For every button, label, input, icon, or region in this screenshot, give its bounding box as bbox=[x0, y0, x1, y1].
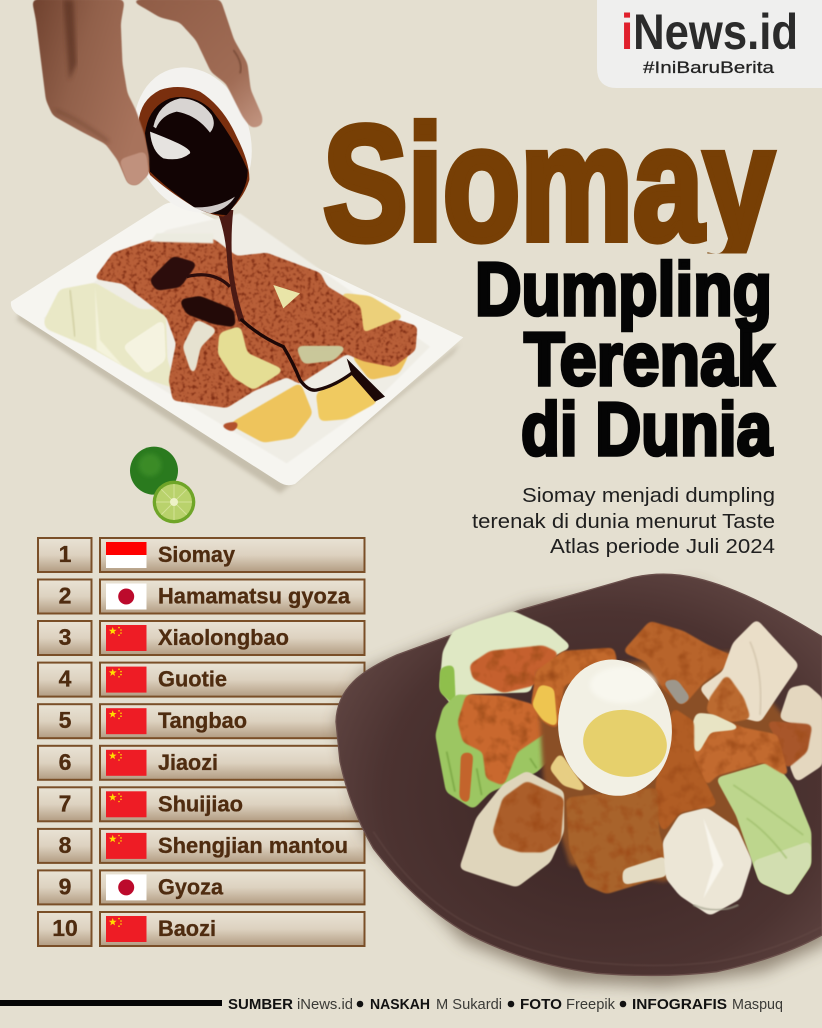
row 1: Siomay bbox=[38, 538, 364, 572]
dark plate bbox=[336, 574, 822, 975]
pale dumplings bbox=[218, 327, 283, 389]
footer credits: INFOGRAFIS bbox=[632, 996, 727, 1013]
small potato under egg bbox=[550, 753, 587, 792]
subtitle text block: Atlas periode Juli 2024 bbox=[550, 535, 775, 558]
cabbage bbox=[44, 283, 177, 388]
far right dumpling bbox=[780, 685, 822, 782]
row 5: Tangbao: Tangbao bbox=[158, 708, 247, 733]
row 6: Jiaozi bbox=[38, 746, 364, 780]
row 4: Guotie bbox=[38, 663, 364, 697]
title: Dumpling Terenak di Dunia: Terenak bbox=[524, 317, 774, 401]
logo wordmark: iNews.id bbox=[621, 4, 798, 60]
hand with bowl bbox=[33, 0, 270, 228]
left dumpling bbox=[460, 772, 563, 887]
row 2: Hamamatsu gyoza: 2 bbox=[59, 582, 71, 608]
sauce on roll bbox=[692, 715, 788, 785]
footer credits bbox=[228, 996, 783, 1013]
row 3: Xiaolongbao bbox=[38, 621, 364, 655]
photo: siomay on dark plate bbox=[336, 574, 822, 987]
row 8: Shengjian mantou: 8 bbox=[59, 832, 72, 858]
title: Dumpling Terenak di Dunia bbox=[475, 247, 774, 471]
row 10: Baozi: 10 bbox=[52, 915, 78, 941]
plate inner well bbox=[43, 213, 430, 463]
limes bbox=[130, 447, 195, 523]
title: Dumpling Terenak di Dunia: Dumpling bbox=[475, 247, 772, 331]
footer credits: Maspuq bbox=[732, 996, 783, 1013]
sauce bowl bbox=[115, 52, 270, 228]
row 9: Gyoza: Gyoza bbox=[158, 874, 224, 899]
white plate bbox=[11, 202, 463, 485]
white cabbage roll bbox=[663, 808, 752, 915]
sauce in bowl bbox=[138, 87, 249, 217]
row 7: Shuijiao: 7 bbox=[59, 790, 71, 816]
subtitle text block bbox=[472, 484, 775, 558]
whole lime bbox=[130, 447, 178, 495]
row 6: Jiaozi: 6 bbox=[59, 749, 71, 775]
central sauce bbox=[655, 708, 717, 832]
row 7: Shuijiao bbox=[38, 787, 364, 821]
footer credits: iNews.id bbox=[297, 996, 353, 1013]
footer credits: Freepik bbox=[566, 996, 615, 1013]
footer credits: FOTO bbox=[520, 996, 562, 1013]
row 7: Shuijiao: Shuijiao bbox=[158, 791, 243, 816]
row 1: Siomay: Siomay bbox=[158, 542, 236, 567]
row 4: Guotie: Guotie bbox=[158, 667, 227, 692]
plate lower rim highlight bbox=[373, 832, 822, 965]
bitter melon lower bbox=[436, 695, 557, 808]
row 8: Shengjian mantou bbox=[38, 829, 364, 863]
lime slice bbox=[153, 481, 195, 523]
potato with sauce bbox=[532, 648, 617, 728]
logo tagline: #IniBaruBerita bbox=[643, 58, 775, 77]
bitter melon top bbox=[440, 612, 571, 707]
footer line bbox=[0, 1000, 222, 1006]
row 9: Gyoza: 9 bbox=[59, 873, 71, 899]
row 5: Tangbao bbox=[38, 704, 364, 738]
peanut sauce bbox=[95, 239, 417, 407]
row 3: Xiaolongbao: Xiaolongbao bbox=[158, 625, 289, 650]
row 2: Hamamatsu gyoza bbox=[38, 580, 364, 614]
plate shadow bbox=[337, 585, 822, 987]
row 8: Shengjian mantou: Shengjian mantou bbox=[158, 833, 348, 858]
footer credits: NASKAH bbox=[370, 996, 430, 1013]
row 3: Xiaolongbao: 3 bbox=[59, 624, 71, 650]
hand palm and thumb bbox=[33, 0, 148, 185]
boiled egg bbox=[549, 652, 681, 803]
photo: white plate of siomay with sauce poured by hand bbox=[11, 202, 463, 493]
subtitle text block: terenak di dunia menurut Taste bbox=[472, 510, 775, 533]
dumpling with sauce, upper bbox=[623, 622, 737, 705]
index finger bbox=[130, 0, 262, 127]
plate shadow bbox=[17, 310, 460, 493]
row 10: Baozi bbox=[38, 912, 364, 946]
brown sauced dumpling bbox=[567, 788, 667, 893]
row 5: Tangbao: 5 bbox=[59, 707, 72, 733]
footer credits: M Sukardi bbox=[436, 996, 502, 1013]
soy sauce blotches bbox=[150, 257, 197, 290]
subtitle text block: Siomay menjadi dumpling bbox=[522, 484, 775, 507]
yellow potatoes bbox=[340, 293, 403, 337]
row 4: Guotie: 4 bbox=[59, 666, 72, 692]
green cabbage roll bbox=[717, 762, 811, 895]
row 2: Hamamatsu gyoza: Hamamatsu gyoza bbox=[158, 584, 351, 608]
ranking list bbox=[38, 538, 364, 946]
row 10: Baozi: Baozi bbox=[158, 916, 216, 941]
row 1: Siomay: 1 bbox=[59, 541, 72, 567]
right dumpling bbox=[700, 620, 798, 722]
footer credits: SUMBER bbox=[228, 996, 293, 1013]
row 9: Gyoza bbox=[38, 870, 364, 904]
title: Dumpling Terenak di Dunia: di Dunia bbox=[521, 387, 773, 471]
logo panel: iNews.id bbox=[597, 0, 822, 88]
soy sauce stream bbox=[217, 210, 385, 402]
row 6: Jiaozi: Jiaozi bbox=[158, 750, 218, 775]
food base under central pieces bbox=[537, 652, 797, 882]
